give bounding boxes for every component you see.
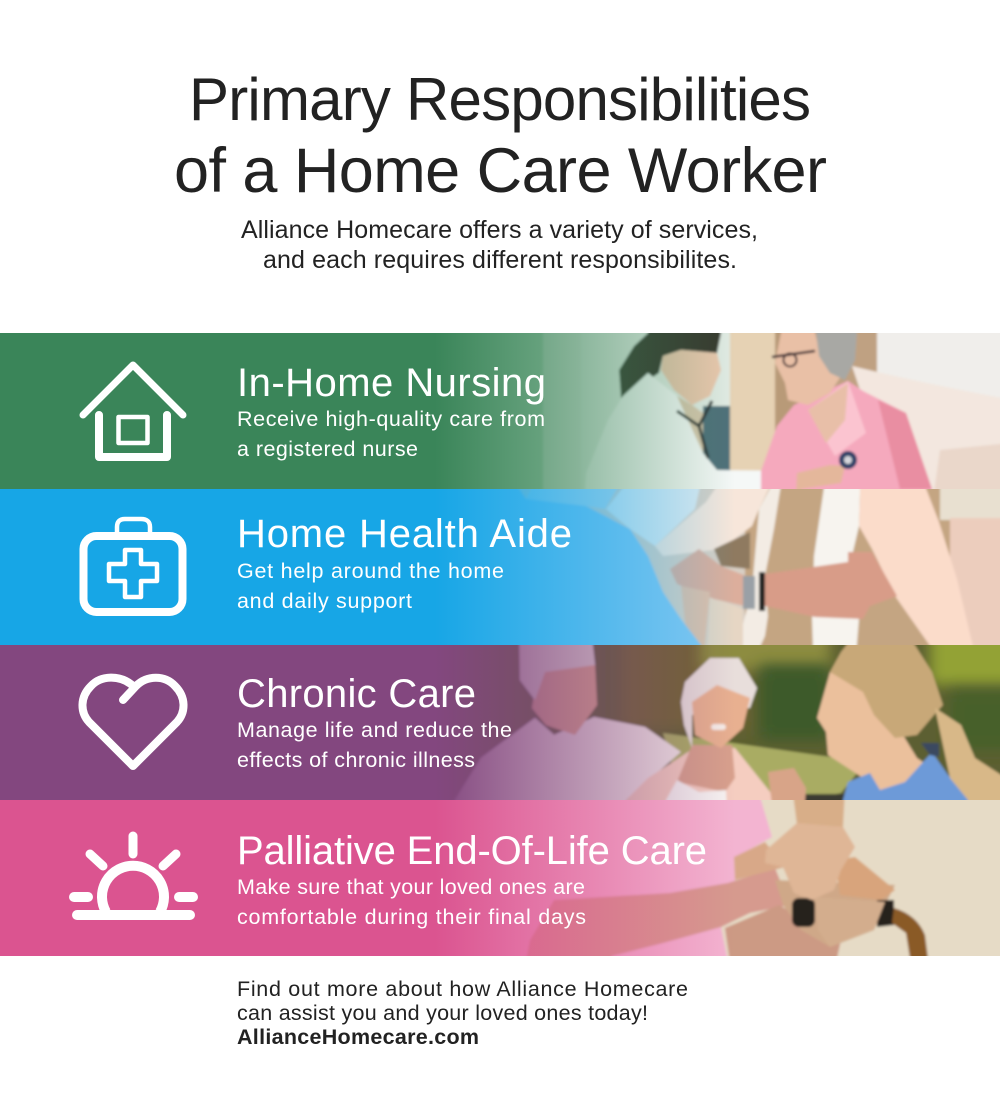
title: Primary Responsibilities (189, 66, 811, 133)
photo: aide holding patient's hand (455, 489, 1000, 645)
subtitle (241, 216, 758, 274)
panel: Palliative End-Of-Life Care (0, 800, 1000, 956)
footer call to action: Find out more about how Alliance Homecare (237, 977, 688, 1001)
icon: sunset (74, 836, 193, 915)
icon: first aid kit (84, 519, 182, 612)
footer call to action (237, 977, 688, 1049)
footer call to action: can assist you and your loved ones today! (237, 1001, 648, 1025)
title (174, 66, 827, 206)
subtitle: Alliance Homecare offers a variety of services, (241, 216, 758, 244)
footer call to action: AllianceHomecare.com (237, 1025, 479, 1049)
heading: Palliative End-Of-Life Care: Palliative End-Of-Life Care (237, 829, 707, 873)
panel: In-Home Nursing (0, 333, 1000, 489)
panel: Chronic Care (0, 645, 1000, 800)
description: a registered nurse (237, 437, 418, 461)
heading: Home Health Aide: Home Health Aide (237, 512, 572, 556)
icon: house (83, 365, 183, 457)
description (237, 559, 504, 613)
description: Get help around the home (237, 559, 504, 583)
photo: smiling couple with nurse (447, 645, 1000, 800)
description: comfortable during their final days (237, 905, 586, 929)
subtitle: and each requires different responsibilites. (263, 246, 737, 274)
heading: In-Home Nursing: In-Home Nursing (237, 361, 546, 405)
photo fade overlay (0, 800, 735, 956)
photo: nurse examining patient (468, 333, 1000, 489)
title: of a Home Care Worker (174, 136, 827, 206)
description: Make sure that your loved ones are (237, 875, 585, 899)
photo: hands resting on a cane (467, 800, 1000, 956)
description: Manage life and reduce the (237, 718, 512, 742)
icon: heart (82, 678, 184, 766)
description (237, 407, 545, 461)
photo fade overlay (0, 645, 735, 800)
description: Receive high-quality care from (237, 407, 545, 431)
description (238, 722, 511, 767)
photo fade overlay (0, 489, 735, 645)
heading: Chronic Care: Chronic Care (237, 672, 476, 716)
description: and daily support (237, 589, 412, 613)
photo fade overlay (0, 333, 735, 489)
description (237, 875, 586, 929)
panel: Home Health Aide (0, 489, 1000, 645)
description: effects of chronic illness (237, 748, 475, 772)
